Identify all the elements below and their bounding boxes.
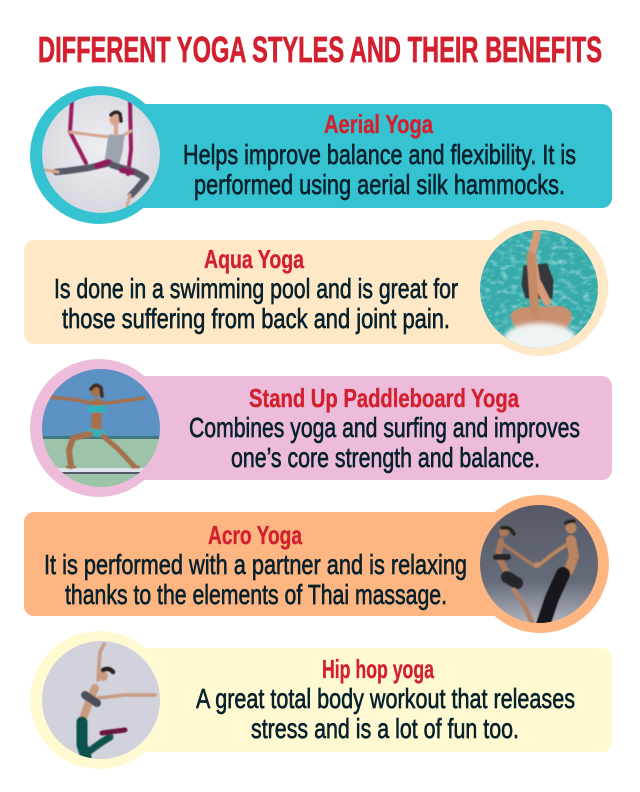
photo: hip hop yoga pose — [42, 641, 160, 759]
panel: Stand Up Paddleboard Yoga — [30, 359, 612, 497]
text: Acro Yoga line 1: It is performed with a partner and is relaxing — [44, 549, 467, 580]
text: Stand Up Paddleboard Yoga line 2: one’s core strength and balance. — [231, 442, 540, 473]
panel background: Aerial Yoga — [120, 104, 612, 208]
photo: acro yoga pose — [480, 505, 598, 625]
panel background: Aqua Yoga — [24, 240, 514, 344]
photo ring: Aqua Yoga — [472, 220, 608, 356]
heading: Stand Up Paddleboard Yoga: Stand Up Paddleboard Yoga — [249, 383, 519, 413]
panel: Aqua Yoga — [24, 220, 608, 356]
panel: Aerial Yoga — [30, 86, 612, 224]
panel background: Hip hop yoga — [120, 648, 612, 752]
photo ring: Aerial Yoga — [30, 86, 168, 224]
heading: Hip hop yoga: Hip hop yoga — [322, 654, 434, 684]
photo: paddleboard yoga pose — [42, 368, 162, 489]
panel: Acro Yoga — [24, 495, 609, 633]
text: Acro Yoga line 2: thanks to the elements of Thai massage. — [65, 579, 447, 610]
text: Aqua Yoga line 1: Is done in a swimming pool and is great for — [54, 273, 458, 304]
heading: Aqua Yoga: Aqua Yoga — [204, 244, 304, 274]
panel background: Acro Yoga — [24, 512, 514, 616]
text: Hip hop yoga line 2: stress and is a lot of fun too. — [251, 713, 519, 744]
text: Aqua Yoga line 2: those suffering from back and joint pain. — [62, 303, 450, 334]
heading: Acro Yoga: Acro Yoga — [208, 520, 302, 550]
photo: aerial yoga pose — [42, 95, 160, 213]
photo: aqua yoga pose — [480, 230, 598, 353]
photo ring: Stand Up Paddleboard Yoga — [30, 359, 168, 497]
heading: Aerial Yoga: Aerial Yoga — [324, 109, 433, 139]
photo ring: Acro Yoga — [471, 495, 609, 633]
photo ring: Hip hop yoga — [30, 631, 168, 769]
panel background: Stand Up Paddleboard Yoga — [120, 376, 612, 480]
panel: Hip hop yoga — [30, 631, 612, 769]
